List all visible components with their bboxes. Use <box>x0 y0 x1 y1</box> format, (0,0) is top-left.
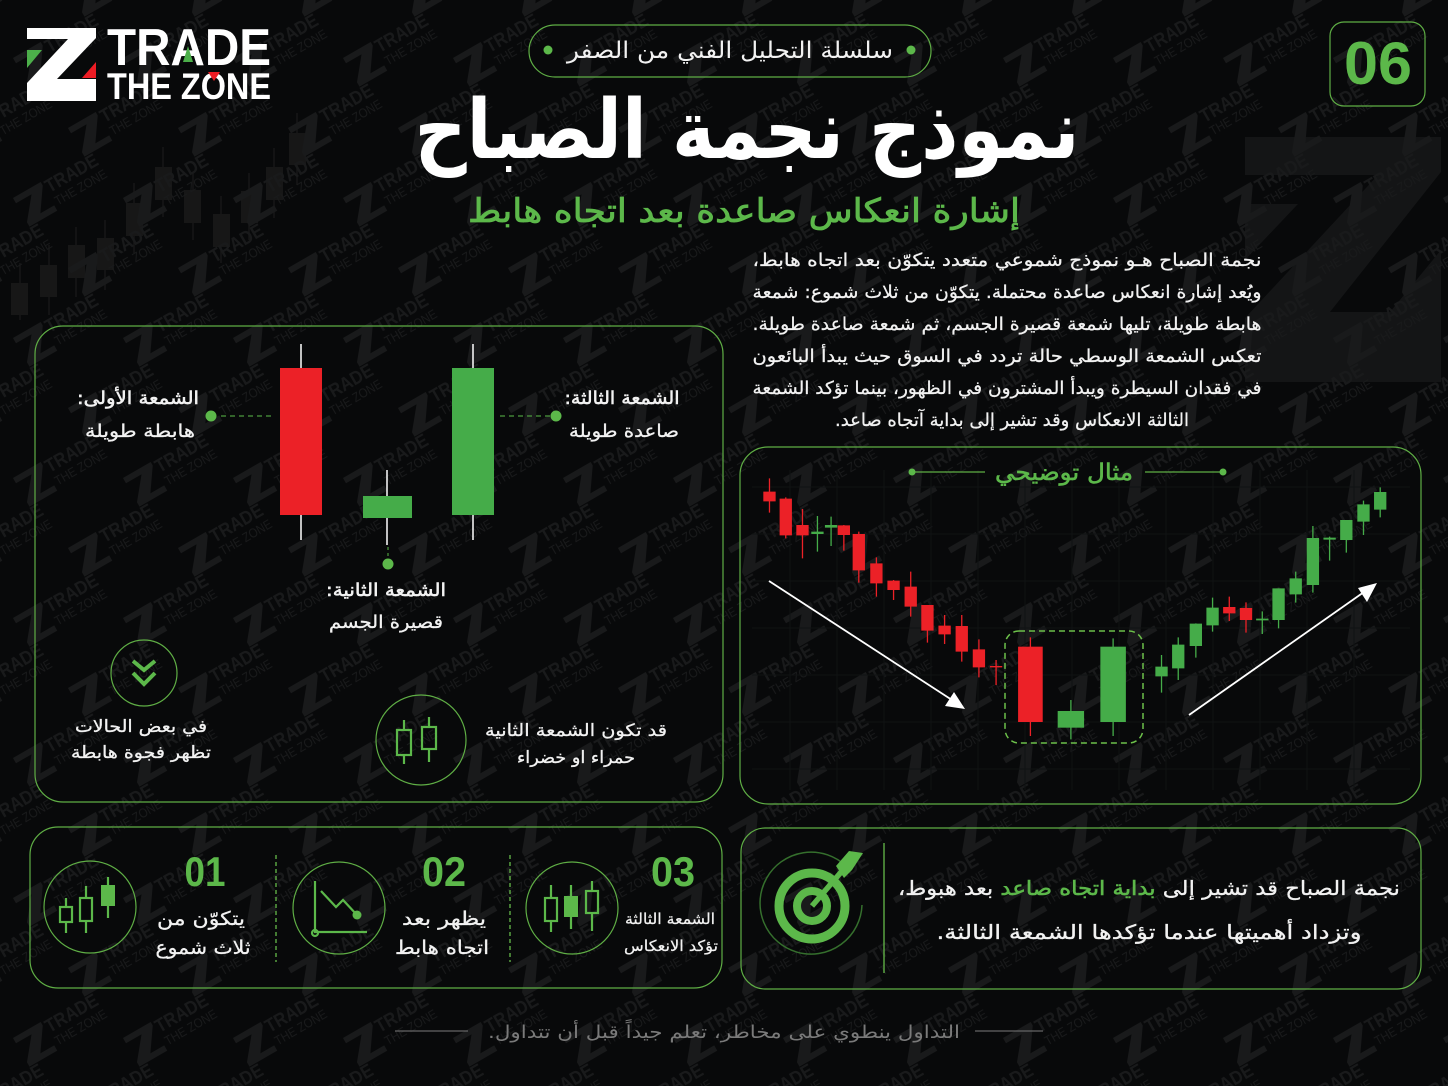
point 01: يتكوّن من <box>157 908 245 930</box>
episode number badge: 06 <box>1344 30 1412 97</box>
point 02: 02 <box>422 848 466 895</box>
icon: target with arrow <box>760 851 863 954</box>
note: second candle colour <box>485 721 667 768</box>
takeaway text <box>898 876 1400 944</box>
point 03: تؤكد الانعكاس <box>624 937 718 955</box>
episode number badge <box>1330 22 1425 106</box>
panel: illustrative example chart <box>740 447 1421 804</box>
second candle: small body <box>363 470 412 545</box>
note: gap down: في بعض الحالات <box>75 717 207 737</box>
panel: key takeaway <box>741 828 1421 989</box>
faint background candles <box>11 113 306 320</box>
series pill <box>529 25 931 77</box>
dashed highlight box <box>1005 631 1143 743</box>
big faint Z logo <box>1245 137 1441 382</box>
arrow: down trend <box>769 581 965 709</box>
panel: three key points <box>30 827 722 988</box>
footer disclaimer: التداول ينطوي على مخاطر، تعلم جيداً قبل أن تتداول. <box>488 1019 960 1043</box>
intro paragraph <box>752 250 1262 431</box>
chart heading: مثال توضيحي <box>995 460 1133 486</box>
label: third candle <box>564 388 680 442</box>
point 01 <box>44 848 250 959</box>
label: second candle <box>326 580 446 633</box>
intro paragraph: نجمة الصباح هـو نموذج شموعي متعدد يتكوّن بعد اتجاه هابط، <box>752 250 1262 271</box>
uptrend candles <box>1155 487 1386 693</box>
note: gap down: تظهر فجوة هابطة <box>71 743 211 763</box>
connector: second candle <box>382 547 394 570</box>
point 03: الشمعة الثالثة <box>625 910 715 928</box>
connector: third candle <box>500 410 562 422</box>
candlestick chart <box>763 478 1386 739</box>
intro paragraph: تعكس الشمعة الوسطي حالة تردد في السوق حيث يبدأ البائعون <box>752 344 1262 367</box>
third candle: long bullish <box>452 344 494 540</box>
arrow: up trend <box>1189 583 1377 715</box>
point 01: ثلاث شموع <box>156 937 250 959</box>
connector: first candle <box>206 410 272 422</box>
icon: two candles <box>376 695 466 785</box>
point 03 <box>526 848 718 955</box>
point 02: يظهر بعد <box>402 908 486 930</box>
logo <box>27 19 271 107</box>
label: second candle: قصيرة الجسم <box>329 612 443 633</box>
icon: gap down chevrons <box>111 640 177 706</box>
morning star candles <box>1018 637 1126 739</box>
label: first candle <box>77 387 199 442</box>
logo: TRADE <box>107 19 271 77</box>
point 02 <box>293 848 489 959</box>
first candle: long bearish <box>280 344 322 540</box>
label: first candle: الشمعة الأولى: <box>77 387 199 409</box>
logo: THE ZONE <box>107 66 271 107</box>
label: second candle: الشمعة الثانية: <box>326 580 446 601</box>
note: second candle colour: حمراء او خضراء <box>517 748 635 768</box>
takeaway text: نجمة الصباح قد تشير إلى بداية اتجاه صاعد بعد هبوط، <box>898 876 1400 901</box>
intro paragraph: الثالثة الانعكاس وقد تشير إلى بداية آتجاه صاعد. <box>835 408 1189 431</box>
label: first candle: هابطة طويلة <box>85 421 195 442</box>
note: second candle colour: قد تكون الشمعة الثانية <box>485 721 667 741</box>
series pill: سلسلة التحليل الفني من الصفر <box>566 38 893 64</box>
takeaway text: وتزداد أهميتها عندما تؤكدها الشمعة الثالثة. <box>936 919 1362 944</box>
point 01: 01 <box>184 848 226 895</box>
note: gap down <box>71 717 211 763</box>
intro paragraph: هابطة طويلة، تليها شمعة قصيرة الجسم، ثم شمعة صاعدة طويلة. <box>752 314 1262 335</box>
label: third candle: صاعدة طويلة <box>569 421 679 442</box>
panel: three candles anatomy <box>35 326 723 802</box>
title: نموذج نجمة الصباح <box>414 83 1080 178</box>
chart heading <box>908 460 1226 486</box>
point 03: 03 <box>651 848 695 895</box>
intro paragraph: ويُعد إشارة انعكاس صاعدة محتملة. يتكوّن من ثلاث شموع: شمعة <box>752 282 1262 303</box>
label: third candle: الشمعة الثالثة: <box>564 388 680 409</box>
downtrend candles <box>763 478 1002 685</box>
point 02: اتجاه هابط <box>395 937 489 959</box>
subtitle: إشارة انعكاس صاعدة بعد اتجاه هابط <box>468 191 1020 231</box>
intro paragraph: في فقدان السيطرة ويبدأ المشترون في الظهور، بينما تؤكد الشمعة <box>752 376 1262 399</box>
